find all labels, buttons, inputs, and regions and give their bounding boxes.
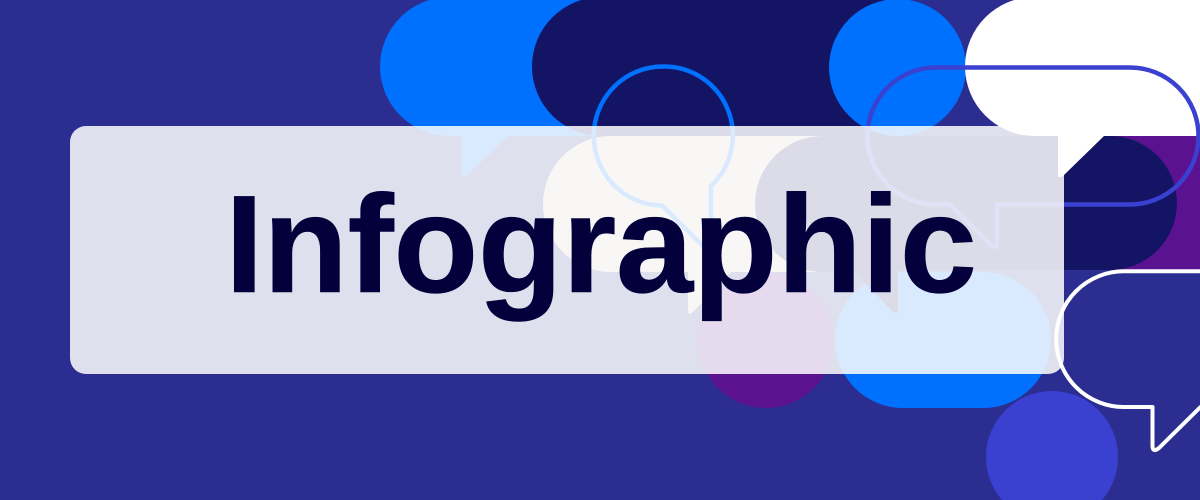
translucent title panel (70, 126, 1064, 374)
indigo outline speech bubble (868, 68, 1198, 247)
title: Infographic (225, 167, 977, 322)
blue outline round speech bubble (594, 66, 733, 251)
periwinkle circle (986, 391, 1118, 500)
off-white speech bubble (543, 136, 880, 314)
purple circle (698, 272, 834, 408)
bright blue pill lower (835, 272, 1051, 408)
navy speech pill top (532, 0, 900, 136)
white outline speech bubble (1056, 271, 1200, 450)
bright blue circle (829, 0, 966, 136)
purple speech bubble block (1000, 136, 1200, 270)
white speech bubble top right (965, 0, 1200, 177)
bright blue speech bubble (380, 0, 620, 177)
navy speech bubble middle (755, 136, 1177, 313)
